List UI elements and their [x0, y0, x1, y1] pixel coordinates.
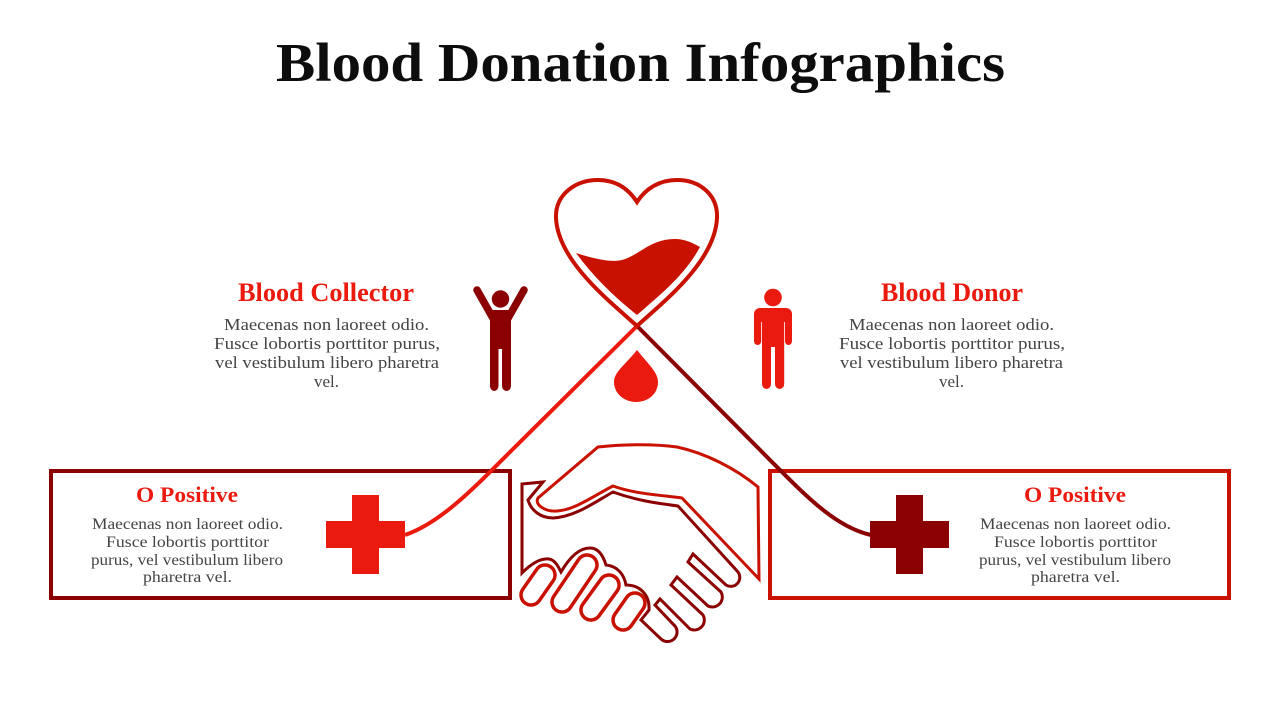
Blood Collector body: vel vestibulum libero pharetra	[215, 353, 440, 372]
red hand outline	[537, 445, 759, 579]
Blood Collector body: Fusce lobortis porttitor purus,	[214, 334, 440, 353]
Blood Collector body: Maecenas non laoreet odio.	[224, 315, 429, 334]
left box heading: O Positive	[136, 482, 238, 507]
Blood Collector heading: Blood Collector	[238, 278, 414, 307]
red finger pills	[517, 551, 649, 634]
Blood Donor heading: Blood Donor	[881, 278, 1023, 307]
icon: cross left	[326, 495, 405, 574]
Blood Donor body: vel.	[939, 372, 964, 391]
Blood Collector body: vel.	[314, 372, 339, 391]
Blood Collector body	[214, 315, 440, 391]
text block: Blood Collector	[214, 278, 440, 391]
text block: Blood Donor	[839, 278, 1065, 391]
panel: left O Positive box	[51, 471, 510, 598]
icon: donor person	[754, 289, 792, 389]
left box text: Fusce lobortis porttitor	[106, 534, 270, 551]
icon: heart with blood	[556, 180, 717, 326]
Blood Donor body: Maecenas non laoreet odio.	[849, 315, 1054, 334]
connector: right curve	[637, 326, 871, 535]
right box heading: O Positive	[1024, 482, 1126, 507]
panel: right O Positive box	[770, 471, 1229, 598]
right box text: purus, vel vestibulum libero	[979, 552, 1171, 569]
right box text: Fusce lobortis porttitor	[994, 534, 1158, 551]
icon: handshake	[517, 445, 759, 642]
connector: left curve	[405, 326, 637, 535]
Blood Donor body: vel vestibulum libero pharetra	[840, 353, 1064, 372]
dark hand outline	[522, 482, 740, 642]
icon: cross right	[870, 495, 949, 574]
left box text: Maecenas non laoreet odio.	[92, 516, 283, 533]
Blood Donor body: Fusce lobortis porttitor purus,	[839, 334, 1065, 353]
heart blood fill	[576, 239, 700, 315]
left box text: purus, vel vestibulum libero	[91, 552, 283, 569]
title: Blood Donation Infographics	[276, 32, 1005, 93]
Blood Donor body	[839, 315, 1065, 391]
right box text: pharetra vel.	[1031, 569, 1120, 586]
left box text	[91, 516, 283, 586]
right box text: Maecenas non laoreet odio.	[980, 516, 1171, 533]
right box text	[979, 516, 1171, 586]
icon: blood drop	[614, 350, 658, 402]
left box text: pharetra vel.	[143, 569, 232, 586]
icon: collector person	[477, 290, 524, 391]
